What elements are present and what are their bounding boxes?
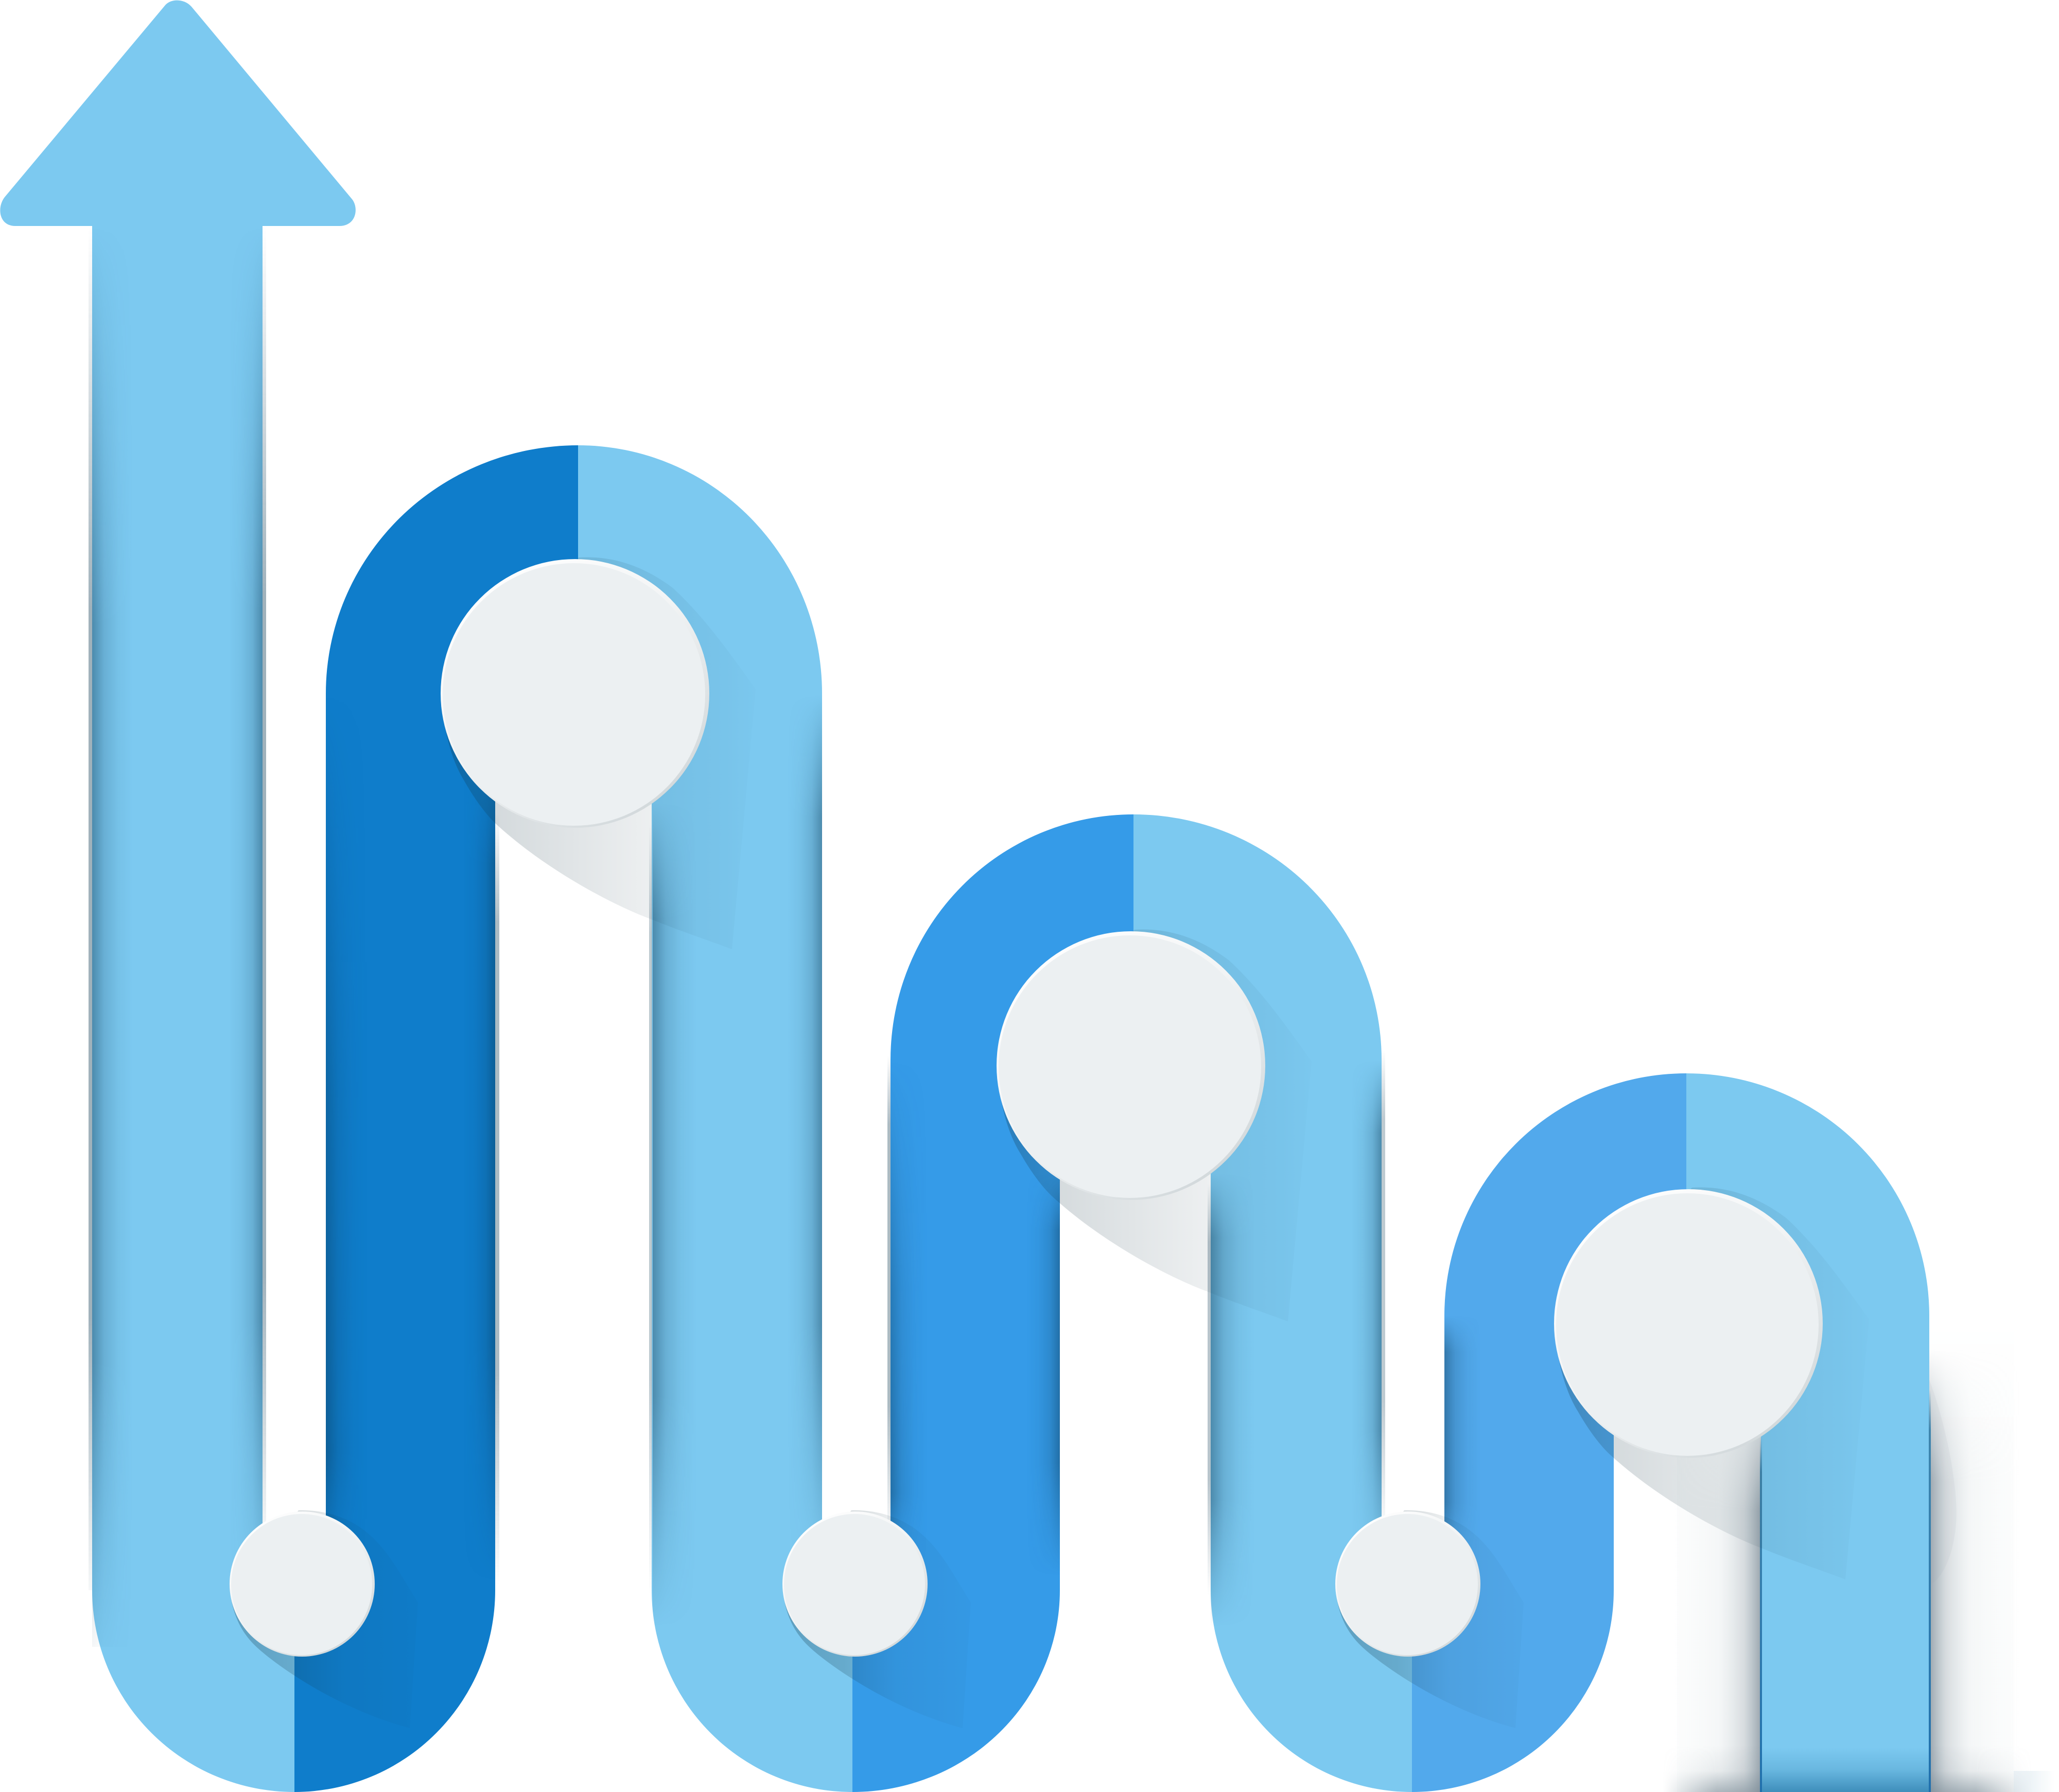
- long shadow: second small circle: [782, 1510, 971, 1728]
- band: light blue second arch right half and third bottom left curve: [1133, 814, 1412, 1792]
- band: medium blue second arch left half and bottom right curve: [852, 814, 1133, 1792]
- band: light blue third arch right half and final strip: [1686, 1073, 1929, 1792]
- circle: second large: [997, 931, 1265, 1200]
- long shadow: first small circle: [230, 1510, 418, 1728]
- circle: first large: [441, 559, 709, 828]
- long shadow: third small circle: [1335, 1510, 1524, 1728]
- thin grey lines along band edges: [89, 226, 1385, 1596]
- faint pale panels behind final strip: [1677, 1308, 2014, 1792]
- long shadow: third large circle: [1555, 1187, 1869, 1579]
- band: dark blue first arch left half and bottom right curve: [294, 445, 578, 1792]
- circle: third small: [1335, 1511, 1480, 1657]
- edge shading on vertical bands: [92, 226, 1480, 1647]
- band: up arrow with head and left half of first bottom curve: [0, 1, 356, 1792]
- band: lighter blue third arch left half and bottom right curve: [1412, 1073, 1686, 1792]
- band: light blue first arch right half and second bottom left curve: [578, 445, 852, 1792]
- blurred grey shadows beside final strip: [1663, 1349, 2055, 1792]
- long shadow: first large circle: [441, 557, 756, 949]
- circle: third large: [1554, 1189, 1823, 1458]
- long shadow: second large circle: [997, 929, 1312, 1321]
- circle: second small: [782, 1511, 928, 1657]
- circle: first small: [230, 1511, 375, 1657]
